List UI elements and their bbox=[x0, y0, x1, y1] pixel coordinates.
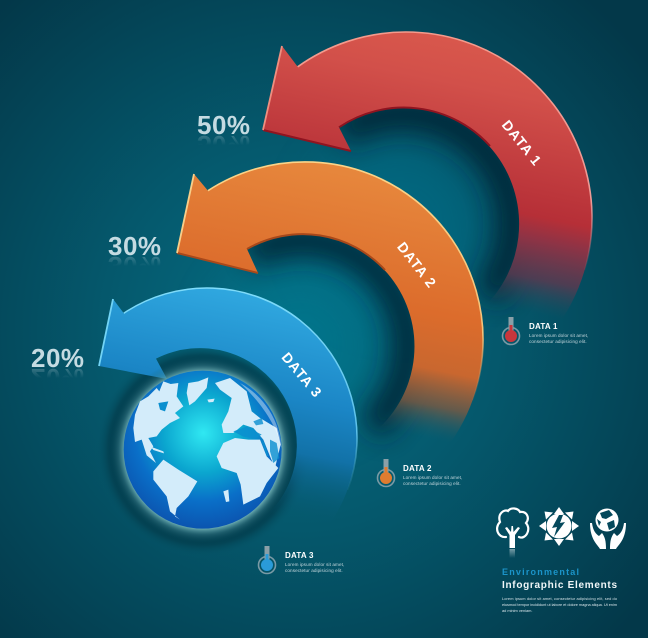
legend: data 1: consectetur adipisicing elit. bbox=[529, 339, 587, 344]
description text: ad minim veniam. bbox=[502, 608, 532, 613]
arrow: data 3 bbox=[99, 288, 357, 544]
title bbox=[502, 567, 617, 591]
arrow: data 1 bbox=[263, 32, 592, 338]
percent: 30%: 30% bbox=[108, 231, 161, 261]
arrow: data 2 bbox=[177, 162, 483, 454]
icon: hands holding globe bbox=[590, 508, 626, 549]
legend: data 3: consectetur adipisicing elit. bbox=[285, 568, 343, 573]
percent: 50%: 50% bbox=[197, 110, 250, 140]
legend: data 3: Lorem ipsum dolor sit amet, bbox=[285, 562, 344, 567]
percent: 30%: 30% bbox=[108, 251, 161, 281]
inner dark ring behind globe bbox=[95, 342, 311, 558]
percent: 20%: 20% bbox=[31, 363, 84, 393]
percent: 20% bbox=[31, 343, 84, 393]
percent: 30% bbox=[108, 231, 161, 281]
description text: eiusmod tempor incididunt ut labore et dolore magna aliqua. Ut enim bbox=[502, 602, 617, 607]
legend: data 2: consectetur adipisicing elit. bbox=[403, 481, 461, 486]
title: Infographic Elements bbox=[502, 580, 617, 591]
inner shadow: data 2 bbox=[220, 241, 408, 427]
percent: 20%: 20% bbox=[31, 343, 84, 373]
legend: data 3: DATA 3 bbox=[285, 551, 314, 560]
description text bbox=[502, 596, 617, 613]
label: data 3: DATA 3 bbox=[279, 349, 325, 401]
legend: data 3 bbox=[258, 546, 344, 574]
icon: thermometer blue bbox=[258, 546, 276, 574]
title: Environmental bbox=[502, 567, 579, 577]
inner shadow: data 1 bbox=[315, 114, 513, 310]
description text: Lorem ipsum dolor sit amet, consectetur adipisicing elit, sed do bbox=[502, 596, 617, 601]
label: data 2: DATA 2 bbox=[394, 239, 440, 291]
legend: data 2 bbox=[378, 459, 462, 486]
legend: data 1: DATA 1 bbox=[529, 322, 558, 331]
legend: data 2: DATA 2 bbox=[403, 464, 432, 473]
icon: thermometer orange bbox=[378, 459, 394, 486]
legend: data 1 bbox=[502, 317, 588, 344]
icon: thermometer red bbox=[502, 317, 520, 344]
icon: sun with bolt bbox=[539, 507, 579, 546]
label: data 1: DATA 1 bbox=[499, 117, 545, 169]
globe bbox=[110, 357, 296, 543]
percent: 50% bbox=[197, 110, 250, 160]
legend: data 1: Lorem ipsum dolor sit amet, bbox=[529, 333, 588, 338]
percent: 50%: 50% bbox=[197, 130, 250, 160]
legend: data 2: Lorem ipsum dolor sit amet, bbox=[403, 475, 462, 480]
icon: tree bbox=[497, 508, 528, 558]
